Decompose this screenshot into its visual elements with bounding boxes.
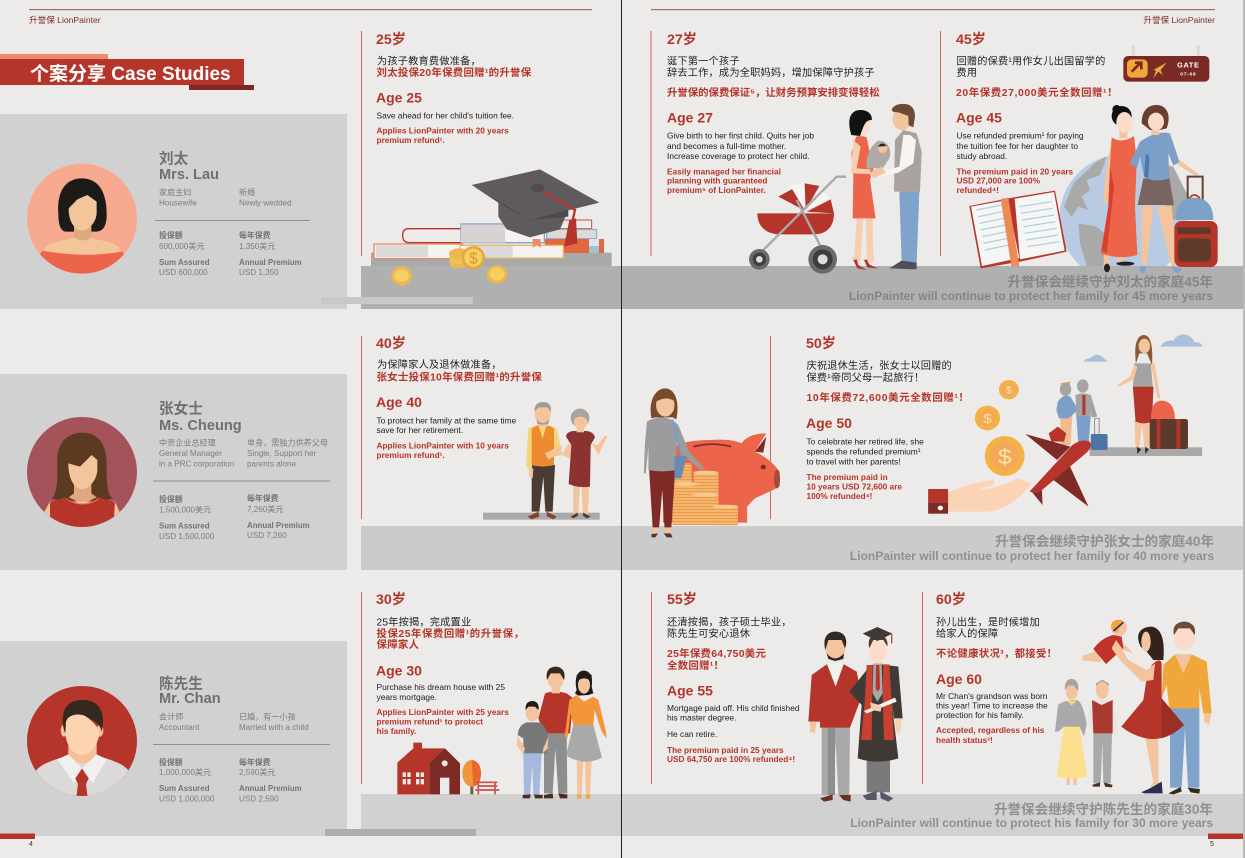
coins falling: $ [998, 444, 1012, 469]
band caption: 40 years: LionPainter will continue to protect her family for 40 more years [850, 549, 1214, 563]
globe [1060, 156, 1188, 266]
page footer left: 4 [29, 841, 33, 848]
woman with bag [644, 388, 704, 537]
illustration: elderly parents [483, 402, 607, 520]
text: Ms. Cheung details: parents alone [247, 460, 297, 469]
text block: age 30: 保障家人 [376, 638, 420, 651]
man [1162, 622, 1212, 794]
boy [517, 701, 548, 798]
text: Ms. Cheung details: 中资企业总经理 [159, 438, 216, 448]
text: Ms. Cheung details: USD 7,260 [247, 531, 287, 540]
illustration: couple with baby and stroller [749, 104, 922, 274]
text: Ms. Cheung details: USD 1,500,000 [159, 532, 215, 541]
panel: Ms. Cheung profile [0, 374, 347, 570]
text block: age 40: 为保障家人及退休做准备， [377, 358, 502, 371]
text block: age 55 [667, 591, 800, 764]
text block: age 27: 27岁 [667, 31, 697, 48]
text: Mrs. Lau name: Mrs. Lau [159, 167, 219, 183]
young woman with luggage [1118, 335, 1188, 454]
text block: age 25: Applies LionPainter with 20 years [376, 126, 509, 136]
text: Mr. Chan details: Annual Premium [239, 784, 302, 793]
woman in red dress [1101, 105, 1137, 272]
text block: age 25: Age 25 [376, 90, 422, 106]
text block: age 55: his master degree. [667, 713, 736, 723]
text block: age 50: 10年保费72,600美元全数回赠¹！ [806, 391, 970, 404]
text block: age 50 [806, 335, 970, 501]
text block: age 27: Easily managed her financial [667, 166, 781, 176]
airplane [1025, 434, 1091, 507]
text block: age 40: 40岁 [376, 335, 406, 352]
open book [969, 191, 1067, 268]
text block: age 45 [956, 31, 1118, 195]
man [869, 104, 922, 269]
text: Ms. Cheung details: General Manager [159, 449, 222, 458]
text block: age 27: planning with guaranteed [667, 176, 768, 186]
band caption: 45 years: LionPainter will continue to protect her family for 45 more years [849, 289, 1213, 303]
text block: age 27: 辞去工作，成为全职妈妈，增加保障守护孩子 [667, 66, 875, 79]
text: Ms. Cheung name [159, 399, 242, 434]
text block: age 60: 给家人的保障 [936, 627, 998, 640]
text block: age 60: 不论健康状况³，都接受！ [936, 647, 1057, 660]
page header right: 升誉保 LionPainter [1143, 14, 1215, 25]
text block: age 45: refunded⁴! [956, 185, 999, 195]
text: Mrs. Lau details: USD 600,000 [159, 268, 208, 277]
text block: age 50: to travel with her parents! [806, 456, 901, 466]
hand [928, 478, 1032, 514]
text block: age 27 [667, 31, 880, 195]
text: Mr. Chan details: Married with a child [239, 723, 309, 732]
text block: age 55: 25年保费64,750美元 [667, 647, 767, 660]
text block: age 40 [376, 335, 542, 460]
band caption: 45 years: 升誉保会继续守护刘太的家庭45年 [1008, 274, 1213, 290]
text block: age 55: USD 64,750 are 100% refunded⁴! [667, 754, 795, 764]
text: Mrs. Lau details: 家庭主妇 [159, 187, 191, 197]
text block: age 40: premium refund¹. [376, 450, 445, 460]
text block: age 45: the tuition fee for her daughter to [956, 141, 1078, 151]
coins falling: $ [1006, 385, 1012, 396]
text block: age 25: 25岁 [376, 31, 406, 48]
text block: age 30: Purchase his dream house with 25 [376, 682, 505, 692]
portrait: Ms. Cheung [27, 417, 137, 530]
text block: age 30: 投保25年保费回赠¹的升誉保， [376, 627, 524, 640]
timeline band: row 2 [361, 526, 1243, 570]
grandmother [1055, 679, 1087, 785]
text block: age 27: Increase coverage to protect her child. [667, 151, 809, 161]
text: Mr. Chan details: 投保额 [159, 757, 183, 767]
text: Ms. Cheung details: in a PRC corporation [159, 460, 234, 469]
text block: age 55: Age 55 [667, 683, 713, 699]
page footer right: 5 [1210, 841, 1214, 848]
panel: Mrs. Lau profile [0, 114, 347, 309]
text: Mrs. Lau details: 1,350美元 [239, 241, 275, 251]
text: Mr. Chan name [159, 675, 221, 707]
text: Ms. Cheung details: 投保额 [159, 494, 183, 504]
text block: age 30: his family. [376, 726, 416, 736]
text block: age 60: protection for his family. [936, 710, 1024, 720]
illustration: mother and daughter travelling [969, 45, 1218, 282]
text block: age 55: 陈先生可安心退休 [667, 627, 750, 640]
text block: age 45: study abroad. [956, 151, 1007, 161]
text block: age 25: premium refund¹. [376, 135, 445, 145]
text block: age 55: 全数回赠¹！ [667, 659, 724, 672]
text block: age 60: 孙儿出生，是时候增加 [936, 616, 1040, 629]
text block: age 50: To celebrate her retired life, she [806, 436, 924, 446]
text block: age 50: 10 years USD 72,600 are [806, 482, 902, 492]
clouds [1083, 334, 1202, 362]
text: Mrs. Lau details: 每年保费 [239, 230, 271, 240]
text: Ms. Cheung name: 张女士 [159, 399, 203, 417]
text block: age 60: Mr Chan's grandson was born [936, 691, 1048, 701]
gate sign [1123, 45, 1209, 82]
text block: age 27: premium⁵ of LionPainter. [667, 185, 766, 195]
text block: age 40: Age 40 [376, 394, 422, 410]
illustration: woman with piggy bank and coins [644, 334, 1202, 537]
father [808, 632, 862, 802]
text block: age 60: 60岁 [936, 591, 966, 608]
text: Mrs. Lau details: 新婚 [239, 187, 255, 197]
text block: age 50: Age 50 [806, 415, 852, 431]
coins falling [975, 380, 1025, 476]
text block: age 25: Save ahead for her child's tuition fee. [376, 111, 514, 121]
mother in red dress [1115, 627, 1184, 793]
illustration: graduation cap, books and coins [371, 169, 612, 286]
text block: age 27: Give birth to her first child. Quits her job [667, 131, 814, 141]
text block: age 45: The premium paid in 20 years [956, 166, 1074, 176]
text block: age 45: 20年保费27,000美元全数回赠¹！ [956, 86, 1118, 99]
band caption: 30 years: LionPainter will continue to protect his family for 30 more years [850, 816, 1213, 830]
luggage [1174, 177, 1218, 267]
text block: age 30: premium refund¹ to protect [376, 717, 483, 727]
page footer right [1208, 834, 1243, 848]
text block: age 30: 30岁 [376, 591, 406, 608]
stroller [749, 177, 846, 274]
text block: age 30 [376, 591, 524, 736]
portrait: Mrs. Lau [23, 164, 140, 277]
text block: age 50: 50岁 [806, 335, 836, 352]
text block: age 60: Accepted, regardless of his [936, 725, 1045, 735]
text: Ms. Cheung details [153, 438, 330, 541]
text block: age 25: 为孩子教育费做准备， [377, 54, 481, 68]
text: Ms. Cheung details: 1,500,000美元 [159, 505, 211, 515]
text block: age 45: 回赠的保费¹用作女儿出国留学的 [956, 54, 1106, 68]
text: Mrs. Lau details: Newly wedded [239, 199, 292, 208]
text block: age 45: 45岁 [956, 31, 986, 48]
mother [565, 671, 607, 799]
text: Ms. Cheung name: Ms. Cheung [159, 418, 242, 434]
text block: age 25: 刘太投保20年保费回赠¹的升誉保 [376, 66, 532, 79]
text: Mr. Chan details: 2,590美元 [239, 767, 275, 777]
text: Mr. Chan details [153, 712, 330, 804]
text: Mrs. Lau details: Annual Premium [239, 258, 302, 267]
text block: age 30: Age 30 [376, 663, 422, 679]
coins falling: $ [983, 412, 992, 427]
ground and travellers [1049, 379, 1202, 456]
band caption: 40 years [850, 533, 1214, 563]
band caption: 30 years [850, 801, 1213, 830]
text: Mrs. Lau name: 刘太 [159, 150, 189, 168]
text: Ms. Cheung details: Single, Support her [247, 449, 317, 458]
text: Mr. Chan details: 1,000,000美元 [159, 767, 211, 777]
baby [1082, 620, 1133, 664]
grandfather [1087, 680, 1119, 787]
text block: age 50: 100% refunded⁴! [806, 491, 872, 501]
text block: age 60: this year! Time to increase the [936, 701, 1048, 711]
illustration: three generations with grandchild [1055, 620, 1212, 794]
text: Mr. Chan details: USD 1,000,000 [159, 795, 215, 804]
text: Mrs. Lau details: 投保额 [159, 230, 183, 240]
text block: age 60 [936, 591, 1057, 745]
text: Mrs. Lau name [159, 150, 219, 183]
text block: age 27: Age 27 [667, 110, 713, 126]
text block: age 40: Applies LionPainter with 10 years [376, 441, 509, 451]
text block: age 55: The premium paid in 25 years [667, 745, 784, 755]
text: Mrs. Lau details [155, 187, 310, 277]
text block: age 27: 升誉保的保费保证⁵，让财务预算安排变得轻松 [667, 86, 880, 99]
text block: age 30: 25年按揭，完成置业 [376, 616, 471, 629]
text block: age 27: 诞下第一个孩子 [667, 54, 740, 68]
text block: age 45: 费用 [956, 66, 977, 79]
illustration: dream house [397, 743, 499, 794]
timeline band: row 3 [361, 794, 1243, 836]
text: Mrs. Lau details: USD 1,350 [239, 268, 279, 277]
coin stacks [673, 463, 738, 525]
text: Mr. Chan details: 每年保费 [239, 757, 271, 767]
gate sign: 07-08 [1180, 71, 1196, 77]
baby [866, 141, 890, 168]
page header left: 升誉保 LionPainter [29, 14, 101, 25]
panel: Mr. Chan profile [0, 641, 347, 836]
text block: age 55: 还清按揭，孩子硕士毕业， [667, 616, 792, 629]
text: Mrs. Lau details: 600,000美元 [159, 241, 204, 251]
text block: age 40: To protect her family at the same time [376, 416, 516, 426]
text: Ms. Cheung details: 单身，需独力供养父母 [247, 438, 328, 448]
page footer left [0, 834, 35, 848]
text block: age 45: Use refunded premium¹ for paying [956, 131, 1084, 141]
title banner: 个案分享 Case Studies [30, 62, 231, 85]
text: Mr. Chan details: 会计师 [159, 712, 183, 722]
text block: age 55: He can retire. [667, 729, 717, 739]
graduate [849, 627, 903, 802]
text block: age 45: USD 27,000 are 100% [956, 176, 1041, 186]
text: Ms. Cheung details: 7,260美元 [247, 504, 283, 514]
timeline dividers [361, 31, 941, 784]
text block: age 45: Age 45 [956, 110, 1002, 126]
text: Ms. Cheung details: Annual Premium [247, 521, 310, 530]
father [526, 402, 563, 519]
text block: age 30: years mortgage. [376, 692, 437, 702]
text block: age 55: Mortgage paid off. His child finished [667, 703, 800, 713]
mother [562, 409, 607, 518]
portrait: Mr. Chan [27, 686, 137, 800]
text: Ms. Cheung details: 每年保费 [247, 493, 279, 503]
woman [849, 110, 878, 270]
illustration: graduation cap, books and coins: $ [469, 250, 478, 267]
title banner [0, 54, 254, 90]
woman in blue top [1130, 105, 1198, 273]
piggy bank [663, 433, 780, 523]
text: Mr. Chan name: 陈先生 [159, 675, 203, 693]
text block: age 40: 张女士投保10年保费回赠¹的升誉保 [376, 370, 542, 384]
text block: age 55: 55岁 [667, 591, 697, 608]
text: Ms. Cheung details: Sum Assured [159, 522, 210, 531]
text block: age 50: spends the refunded premium¹ [806, 446, 921, 456]
band caption: 45 years [849, 274, 1213, 303]
timeline band: row 1 [361, 266, 1243, 309]
text: Mr. Chan name: Mr. Chan [159, 691, 221, 707]
illustration: young family [517, 667, 607, 799]
text block: age 50: 保费¹帝同父母一起旅行！ [806, 371, 924, 384]
gate sign: GATE [1177, 61, 1200, 70]
illustration: father and graduating child [808, 627, 903, 802]
text: Mrs. Lau details: Housewife [159, 199, 197, 208]
text block: age 30: Applies LionPainter with 25 years [376, 707, 509, 717]
text: Mr. Chan details: USD 2,590 [239, 795, 279, 804]
text block: age 27: and becomes a full-time mother. [667, 141, 786, 151]
text: Mrs. Lau details: Sum Assured [159, 258, 210, 267]
text: Mr. Chan details: 已婚，有一小孩 [239, 712, 296, 722]
text block: age 50: The premium paid in [806, 472, 888, 482]
text block: age 60: health status³! [936, 735, 993, 745]
band caption: 30 years: 升誉保会继续守护陈先生的家庭30年 [994, 801, 1213, 817]
text block: age 60: Age 60 [936, 671, 982, 687]
band caption: 40 years: 升誉保会继续守护张女士的家庭40年 [995, 533, 1214, 549]
text block: age 40: save for her retirement. [376, 425, 463, 435]
text: Mr. Chan details: Accountant [159, 723, 200, 732]
text block: age 25 [376, 31, 532, 145]
father [538, 667, 573, 798]
text: Mr. Chan details: Sum Assured [159, 784, 210, 793]
text block: age 50: 庆祝退休生活，张女士以回赠的 [806, 359, 952, 372]
